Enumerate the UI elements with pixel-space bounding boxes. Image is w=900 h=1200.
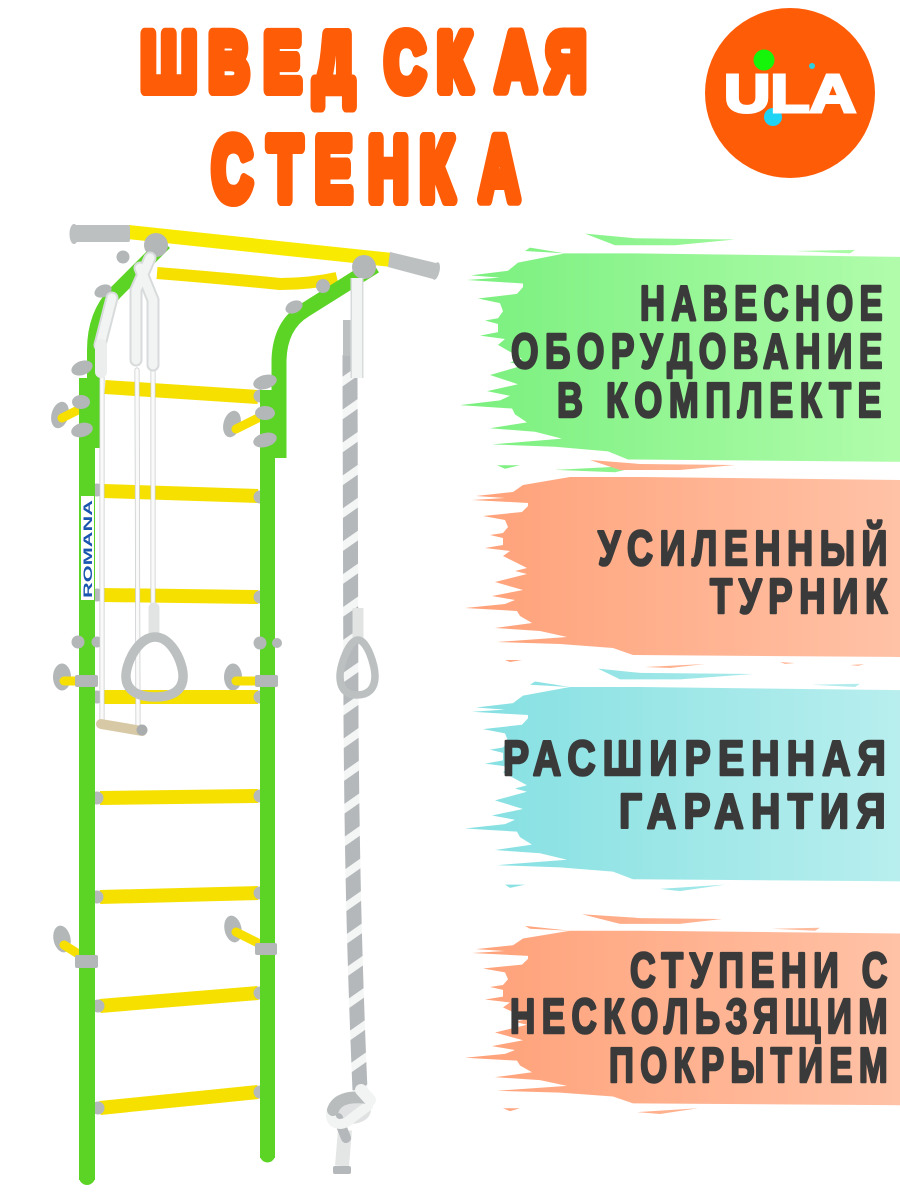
logo: ULA: ULA	[724, 64, 856, 124]
trapeze wooden bar	[101, 724, 148, 736]
title: ШВЕДСКАЯ	[141, 16, 586, 108]
handle grips	[70, 224, 441, 281]
wall mount brackets	[48, 400, 258, 955]
gymnastic ring right	[340, 640, 375, 695]
top yellow bar	[128, 232, 392, 260]
orange brush stroke	[465, 460, 900, 668]
gymnastic ring left	[126, 637, 183, 697]
ROMANA brand label	[81, 496, 95, 600]
logo: ULA	[705, 8, 875, 178]
grey joints and bolts	[69, 233, 376, 968]
panel: reinforced pull-up bar	[465, 460, 900, 668]
rope knot	[331, 1090, 371, 1174]
green brush stroke	[460, 234, 900, 472]
panel text	[511, 277, 889, 428]
climbing rope	[343, 278, 360, 1090]
panel text	[598, 521, 894, 624]
gym ring ropes and trapeze ropes	[100, 258, 154, 725]
panel: hanging equipment	[460, 234, 900, 472]
panel: extended warranty	[465, 669, 900, 891]
lower top bar	[157, 273, 337, 284]
title: СТЕНКА	[212, 118, 520, 219]
rung end caps	[90, 390, 266, 1114]
orange brush stroke	[465, 914, 900, 1114]
blue brush stroke	[465, 669, 900, 891]
panel text	[510, 944, 894, 1093]
yellow rungs	[100, 387, 258, 1108]
ROMANA brand label: ROMANA	[81, 499, 95, 598]
green uprights	[79, 243, 375, 1185]
panel: anti-slip steps	[465, 914, 900, 1114]
wall bars product illustration	[48, 224, 441, 1185]
panel text	[503, 732, 893, 839]
title	[141, 16, 586, 219]
